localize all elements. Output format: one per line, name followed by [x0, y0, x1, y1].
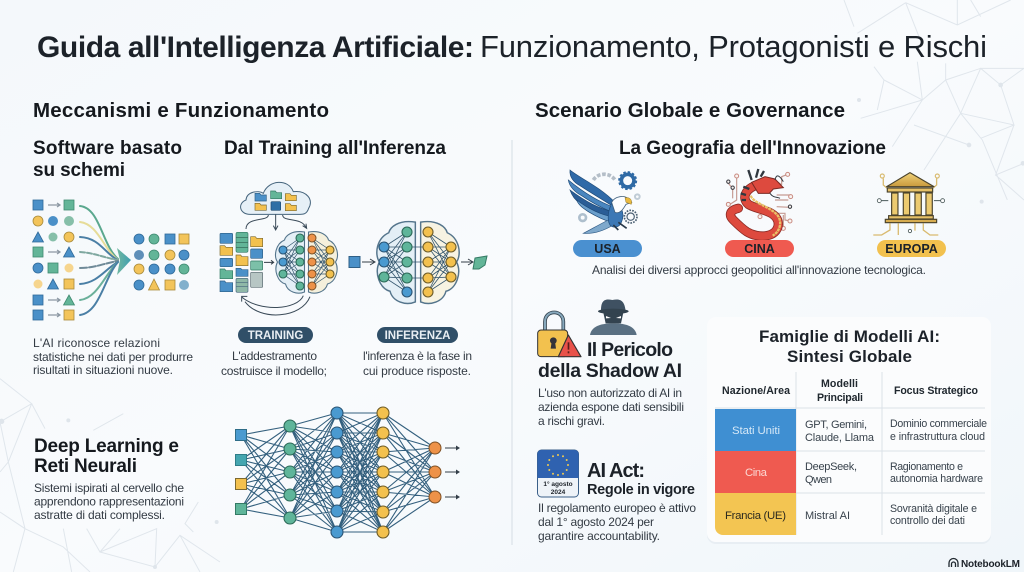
title: Funzionamento, Protagonisti e Rischi [480, 29, 987, 64]
title: Guida all'Intelligenza Artificiale: [37, 31, 474, 64]
icon: EU calendar badge: 2024 [551, 489, 566, 496]
icon: temple with circuits [873, 173, 945, 235]
panel: famiglie di modelli AI table [707, 317, 991, 544]
block: EUROPA [873, 173, 946, 257]
row: Stati Uniti: GPT, Gemini, [805, 419, 867, 431]
icon: brain inferenza [377, 222, 459, 303]
icon: dragon with circuits [726, 169, 793, 236]
text: training: costruisce il modello; [221, 364, 327, 378]
heading: software basato su schemi [33, 138, 182, 181]
icon: brain training [276, 232, 337, 293]
text: riconoscimento schemi [33, 336, 193, 377]
icon: cloud with folders [241, 182, 310, 230]
diagram: training [220, 182, 337, 378]
heading: il pericolo della shadow AI [538, 339, 682, 382]
label: training [238, 327, 313, 343]
label: inferenza [377, 327, 458, 343]
panel: meccanismi e funzionamento [32, 99, 487, 538]
row: Cina: Ragionamento e [890, 461, 963, 473]
label: EUROPA: EUROPA [885, 242, 938, 256]
row: Stati Uniti [715, 409, 987, 451]
row: Cina [715, 451, 983, 493]
row: Francia (UE): controllo dei dati [890, 515, 965, 527]
diagram: inferenza [349, 222, 487, 378]
text: deep learning: Sistemi ispirati al cervello che [34, 481, 184, 495]
heading: software basato su schemi: Software basato [33, 138, 182, 159]
heading: AI Act [587, 460, 695, 498]
label: USA: USA [594, 242, 621, 256]
row: Cina: Qwen [805, 474, 832, 486]
label: training: TRAINING [248, 330, 303, 342]
text: AI Act: Il regolamento europeo è attivo [538, 501, 696, 515]
text: AI Act: garantire accountability. [538, 529, 660, 543]
heading: scenario globale: Scenario Globale e Governance [535, 99, 845, 122]
icon: dataset folders [220, 232, 310, 315]
row: Stati Uniti: Dominio commerciale [890, 418, 987, 430]
text: riconoscimento schemi: L'AI riconosce relazioni [33, 336, 160, 350]
icon: EU calendar badge [538, 450, 578, 497]
row: Cina: Cina [745, 467, 768, 479]
heading: AI Act: Regole in vigore [587, 482, 695, 498]
icon: EU calendar badge: 1° agosto [543, 480, 573, 488]
icon: padlock with warning [538, 312, 581, 357]
table header: Principali [817, 392, 863, 404]
heading: AI Act: AI Act: [587, 460, 645, 482]
text: deep learning [34, 481, 184, 522]
heading: software basato su schemi: su schemi [33, 160, 125, 181]
text: riconoscimento schemi: statistiche nei dati per produrre [33, 350, 193, 364]
block: AI Act [538, 450, 696, 543]
table header: Modelli [821, 378, 858, 390]
row: Cina: autonomia hardware [890, 473, 983, 485]
heading: il pericolo della shadow AI: della Shadow AI [538, 360, 682, 382]
row: Stati Uniti: e infrastruttura cloud [890, 431, 985, 443]
diagram: schemi in ingresso e uscita [32, 200, 189, 320]
text: analisi approcci geopolitici: Analisi dei diversi approcci geopolitici all'innovazione tecnologica. [592, 263, 926, 277]
heading: famiglie di modelli: Sintesi Globale [787, 347, 912, 366]
block: CINA [725, 169, 794, 257]
icon: eagle with gears [568, 170, 640, 233]
row: Francia (UE): Mistral AI [805, 510, 850, 522]
text: deep learning: apprendono rappresentazioni [34, 494, 184, 508]
row: Cina: DeepSeek, [805, 461, 857, 473]
text: inferenza: cui produce risposte. [363, 364, 471, 378]
text: shadow AI [538, 386, 684, 428]
row: Stati Uniti: Stati Uniti [732, 425, 780, 437]
label: inferenza: INFERENZA [385, 330, 450, 342]
row: Stati Uniti: Claude, Llama [805, 432, 875, 444]
heading: meccanismi: Meccanismi e Funzionamento [33, 99, 329, 122]
heading: deep learning: Deep Learning e [34, 436, 179, 457]
row: Francia (UE): Francia (UE) [725, 510, 786, 522]
title [37, 29, 987, 64]
table header: Nazione/Area [722, 385, 790, 397]
text: inferenza [363, 349, 472, 378]
icon: spy silhouette [590, 299, 637, 335]
label: CINA: CINA [744, 242, 775, 256]
logo: NotebookLM: NotebookLM [961, 559, 1020, 570]
text: riconoscimento schemi: risultati in situazioni nuove. [33, 363, 173, 377]
chart: rete neurale [236, 407, 460, 538]
heading: dal training all'inferenza: Dal Training all'Inferenza [224, 138, 446, 159]
panel: scenario globale e governance [535, 99, 991, 544]
text: deep learning: astratte di dati complessi. [34, 508, 165, 522]
table header: Focus Strategico [894, 385, 979, 397]
block: shadow AI [538, 299, 684, 428]
text: AI Act: dal 1° agosto 2024 per [538, 515, 654, 529]
heading: famiglie di modelli [759, 327, 940, 366]
block: USA [568, 170, 642, 257]
row: Francia (UE): Sovranità digitale e [890, 503, 977, 515]
heading: il pericolo della shadow AI: Il Pericolo [587, 339, 673, 361]
text: inferenza: l'inferenza è la fase in [363, 349, 472, 363]
text: shadow AI: azienda espone dati sensibili [538, 400, 684, 414]
heading: famiglie di modelli: Famiglie di Modelli AI: [759, 327, 940, 346]
row: Francia (UE) [715, 493, 977, 535]
text: training [221, 349, 327, 378]
text: AI Act [538, 501, 696, 543]
heading: deep learning: Reti Neurali [34, 456, 137, 477]
heading: geografia dell'innovazione: La Geografia dell'Innovazione [619, 138, 886, 159]
table header [722, 378, 979, 404]
text: training: L'addestramento [232, 349, 317, 363]
heading: deep learning [34, 436, 179, 477]
text: shadow AI: L'uso non autorizzato di AI in [538, 386, 682, 400]
text: shadow AI: a rischi gravi. [538, 414, 605, 428]
